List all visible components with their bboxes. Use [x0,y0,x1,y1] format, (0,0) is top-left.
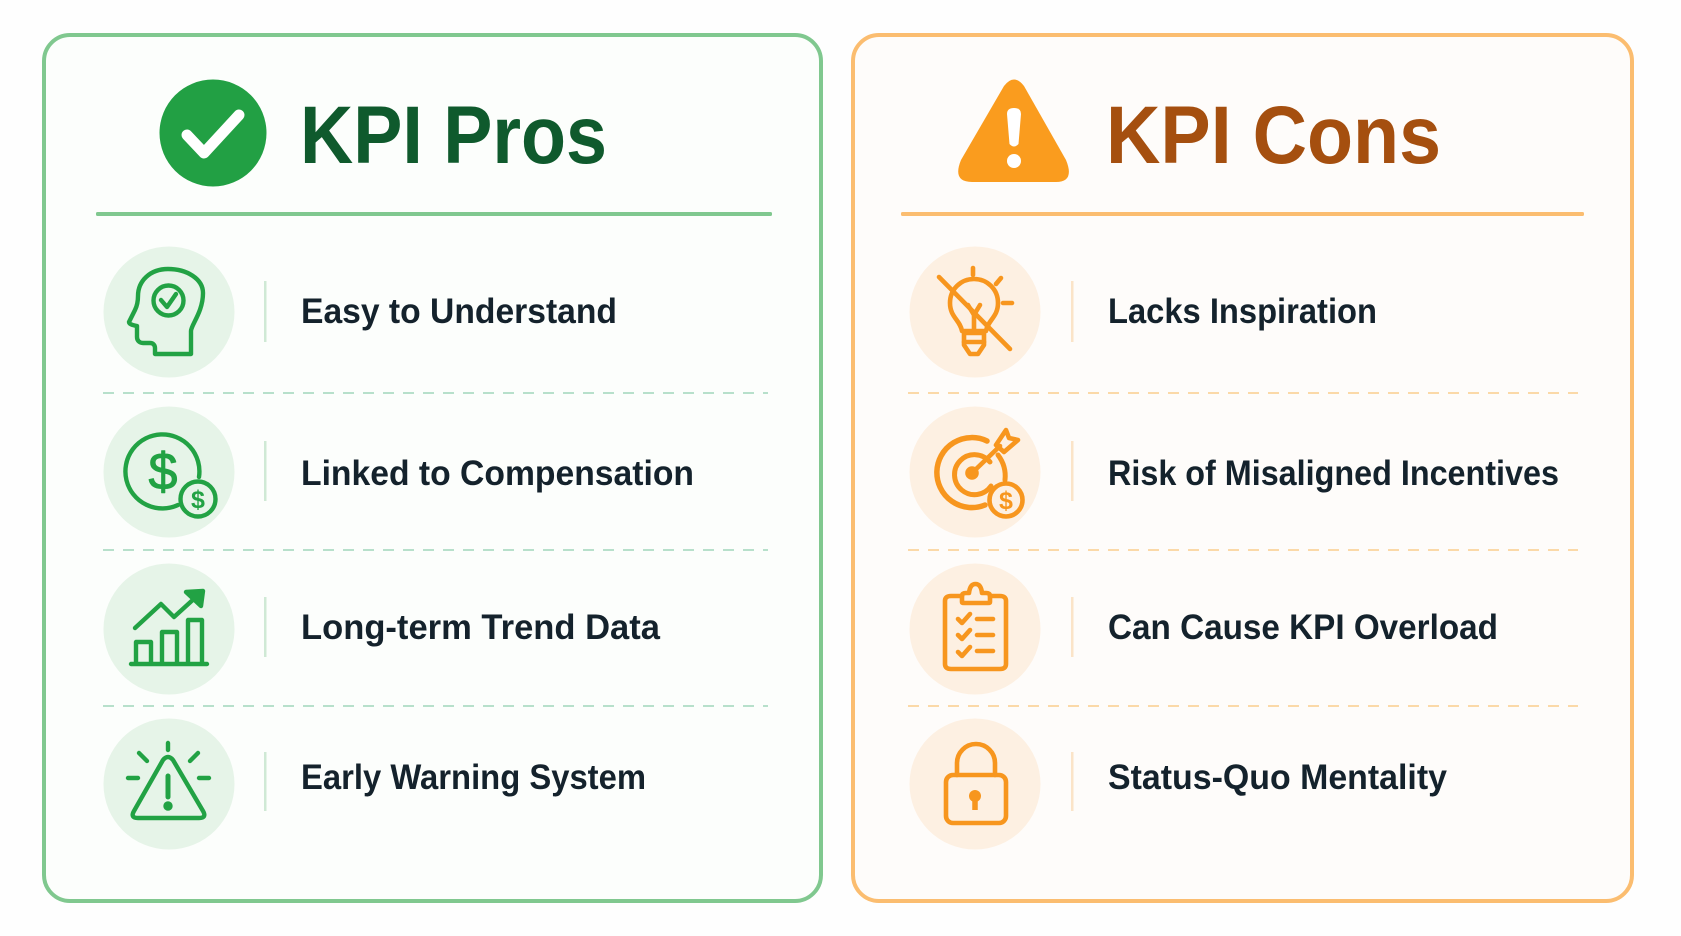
label: Easy to Understand [301,292,617,331]
icon: crossed light bulb [939,268,1012,354]
icon: green check badge [160,80,266,186]
label: Linked to Compensation [301,454,694,493]
icon: dollar coin: $ [191,486,205,514]
row: Lacks Inspiration [910,246,1377,378]
icon: orange warning triangle [958,80,1069,182]
row: Easy to Understand [104,246,617,378]
icon: target with arrow and coin: $ [999,487,1013,515]
row: Can Cause KPI Overload [910,564,1498,694]
icon: dollar coin: $ [149,443,178,501]
icon: growth chart [131,591,207,664]
heading: KPI Pros: KPI Pros [300,90,607,181]
icon: warning alert [128,743,209,818]
label: Status-Quo Mentality [1108,758,1448,797]
icon: target with arrow and coin [937,430,1022,516]
row: Linked to Compensation [104,406,694,538]
icon: padlock [946,744,1006,823]
icon: head with check [129,269,203,354]
heading: KPI Cons: KPI Cons [1106,90,1441,181]
row: Long-term Trend Data [104,564,661,694]
row: Early Warning System [104,718,646,850]
row: Risk of Misaligned Incentives [910,406,1559,538]
label: Long-term Trend Data [301,608,661,647]
panel: KPI Pros [44,35,821,901]
icon: clipboard checklist [945,584,1006,669]
label: Risk of Misaligned Incentives [1108,454,1559,493]
label: Early Warning System [301,758,646,797]
label: Can Cause KPI Overload [1108,608,1498,647]
icon: dollar coin [125,434,216,516]
row: Status-Quo Mentality [910,718,1448,850]
label: Lacks Inspiration [1108,292,1377,331]
panel: KPI Cons [853,35,1632,901]
